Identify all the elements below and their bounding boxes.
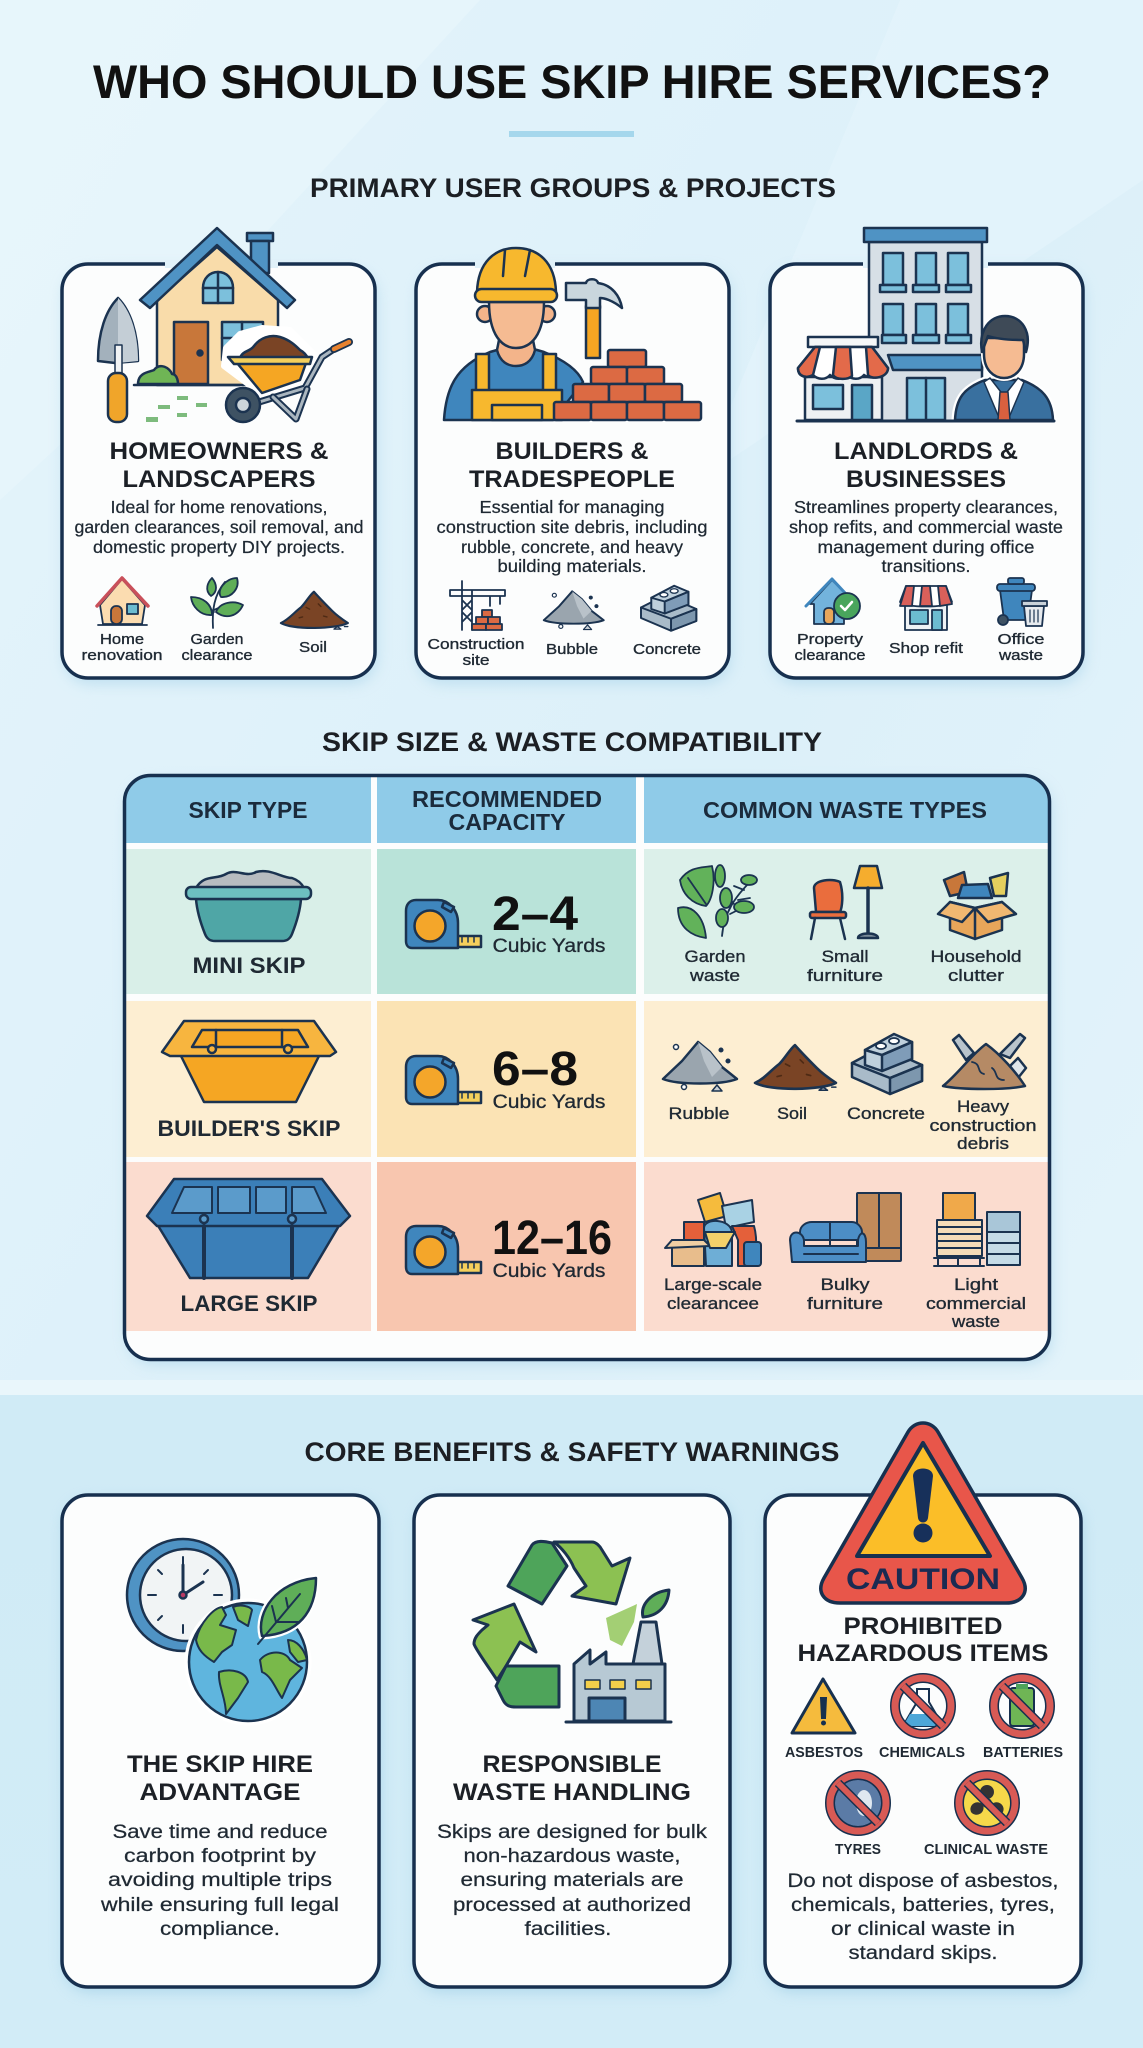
card description xyxy=(100,1821,339,1940)
small labels: Office xyxy=(998,631,1044,648)
small labels xyxy=(82,631,327,664)
small labels: Soil xyxy=(299,639,327,656)
card heading: ADVANTAGE xyxy=(140,1779,300,1806)
heading: primary user groups: PRIMARY USER GROUPS & PROJECTS xyxy=(310,173,836,203)
card description xyxy=(74,497,364,557)
waste labels row two: debris xyxy=(957,1134,1009,1153)
waste labels row two: construction xyxy=(930,1116,1036,1135)
icon: household clutter xyxy=(938,872,1016,939)
card description: Ideal for home renovations, xyxy=(110,497,328,517)
small labels: Garden xyxy=(190,631,244,648)
card heading: WASTE HANDLING xyxy=(453,1779,691,1806)
icon: heavy debris xyxy=(943,1034,1026,1089)
icon: office building, shop and businessman xyxy=(797,228,1054,421)
icon: large skip xyxy=(147,1179,350,1278)
icon: garden clearance xyxy=(191,578,243,628)
card description: non-hazardous waste, xyxy=(464,1845,680,1867)
waste labels row one: Garden xyxy=(684,947,746,966)
waste labels row three: commercial xyxy=(926,1294,1026,1313)
card description: Do not dispose of asbestos, xyxy=(788,1870,1058,1892)
card heading: TRADESPEOPLE xyxy=(469,466,675,493)
icon: shop refit xyxy=(900,586,952,630)
small labels: clearance xyxy=(794,647,866,664)
card description: domestic property DIY projects. xyxy=(93,537,345,557)
capacity: 6-8: 6–8 xyxy=(492,1043,578,1096)
card description: Streamlines property clearances, xyxy=(794,497,1058,517)
card description xyxy=(788,1870,1058,1964)
waste labels row one: Household xyxy=(930,947,1022,966)
card heading: HOMEOWNERS & xyxy=(110,438,328,465)
card heading xyxy=(834,438,1018,493)
icon: no tyres xyxy=(830,1775,886,1831)
title: WHO SHOULD USE SKIP HIRE SERVICES? xyxy=(93,55,1051,108)
table headers: COMMON WASTE TYPES xyxy=(703,797,987,823)
icon: sofa and wardrobe xyxy=(790,1193,901,1262)
card description: Skips are designed for bulk xyxy=(437,1821,707,1843)
card description: construction site debris, including xyxy=(436,517,708,537)
waste labels row three: furniture xyxy=(807,1294,883,1313)
icon: no chemicals xyxy=(895,1678,951,1734)
icon: caution sign xyxy=(821,1423,1025,1603)
small labels: Property xyxy=(797,631,864,648)
icon: garden waste xyxy=(678,865,757,938)
card heading: PROHIBITED xyxy=(844,1613,1002,1640)
waste labels row two: Concrete xyxy=(847,1104,925,1123)
table headers: CAPACITY xyxy=(448,809,566,835)
hazard labels: BATTERIES xyxy=(983,1744,1063,1761)
capacity: 12-16 xyxy=(406,1212,612,1282)
card heading xyxy=(453,1751,691,1806)
small labels: renovation xyxy=(82,647,162,664)
icon: concrete xyxy=(852,1034,922,1094)
icon: recycling arrows and factory xyxy=(473,1541,671,1722)
hazard labels: TYRES xyxy=(835,1841,881,1858)
card description: transitions. xyxy=(882,556,970,576)
small labels: Home xyxy=(100,631,144,648)
card description xyxy=(437,1821,707,1940)
icon: house, trowel and wheelbarrow xyxy=(98,228,349,422)
card description: management during office xyxy=(818,537,1034,557)
icon: clock and globe with leaf xyxy=(127,1539,316,1722)
card description: chemicals, batteries, tyres, xyxy=(791,1894,1055,1916)
waste labels row three: clearancee xyxy=(667,1294,759,1313)
waste labels row three: waste xyxy=(951,1312,1000,1331)
icon: rubble xyxy=(544,591,604,630)
waste labels row one: waste xyxy=(689,966,740,985)
small labels: Bubble xyxy=(546,641,598,658)
panel: builders and tradespeople xyxy=(416,248,731,684)
card heading xyxy=(127,1751,313,1806)
card heading xyxy=(798,1613,1048,1667)
icon: mini skip xyxy=(186,871,311,941)
icon: property clearance xyxy=(806,579,860,624)
icon: lawn dashes xyxy=(146,396,207,422)
card heading: RESPONSIBLE xyxy=(482,1751,662,1778)
small labels: clearance xyxy=(182,647,252,664)
capacity: 12-16: 12–16 xyxy=(492,1212,612,1265)
capacity: 6-8: Cubic Yards xyxy=(492,1092,606,1113)
heading: skip size: SKIP SIZE & WASTE COMPATIBILITY xyxy=(322,727,822,757)
card description: Save time and reduce xyxy=(112,1821,328,1843)
icon: large-scale clearance xyxy=(665,1193,761,1266)
waste labels row three xyxy=(664,1275,1026,1331)
title underline xyxy=(509,131,634,137)
small labels: site xyxy=(462,652,490,669)
label: LARGE SKIP xyxy=(180,1291,318,1316)
capacity: 2-4: Cubic Yards xyxy=(492,936,606,957)
icon: caution sign: CAUTION xyxy=(846,1563,1000,1596)
card description: Essential for managing xyxy=(480,497,664,517)
panel: the skip hire advantage xyxy=(62,1495,381,1992)
waste labels row two: Soil xyxy=(777,1104,807,1123)
card description: while ensuring full legal xyxy=(100,1894,339,1916)
icon: builder's skip xyxy=(162,1021,336,1102)
hazard labels xyxy=(785,1744,1063,1761)
waste labels row two: Rubble xyxy=(668,1104,730,1123)
waste labels row one xyxy=(684,947,1022,985)
label: BUILDER'S SKIP xyxy=(158,1116,340,1141)
panel: homeowners and landscapers xyxy=(62,228,377,684)
card description: standard skips. xyxy=(848,1942,998,1964)
card heading: BUSINESSES xyxy=(846,466,1006,493)
card description: shop refits, and commercial waste xyxy=(789,517,1063,537)
hazard labels: CLINICAL WASTE xyxy=(924,1841,1048,1858)
small labels: waste xyxy=(998,647,1043,664)
table headers: SKIP TYPE xyxy=(188,797,308,823)
waste labels row three: Light xyxy=(954,1275,998,1294)
capacity: 2-4: 2–4 xyxy=(492,888,578,941)
card description: building materials. xyxy=(498,556,646,576)
waste labels row two xyxy=(668,1097,1036,1153)
waste labels row one: furniture xyxy=(807,966,883,985)
icon: rubble xyxy=(663,1042,737,1091)
panel: landlords and businesses xyxy=(770,228,1085,684)
heading: core benefits: CORE BENEFITS & SAFETY WARNINGS xyxy=(304,1437,840,1467)
icon: soil xyxy=(755,1045,836,1090)
hazard labels: ASBESTOS xyxy=(785,1744,863,1761)
card description: ensuring materials are xyxy=(460,1869,684,1891)
waste labels row three: Bulky xyxy=(820,1275,870,1294)
card description: rubble, concrete, and heavy xyxy=(461,537,683,557)
small labels: Construction xyxy=(428,636,524,653)
icon: home renovation xyxy=(97,578,148,625)
card description: compliance. xyxy=(160,1918,280,1940)
card description: processed at authorized xyxy=(453,1894,691,1916)
capacity: 12-16: Cubic Yards xyxy=(492,1261,606,1282)
hazard labels xyxy=(835,1841,1048,1858)
waste labels row one: clutter xyxy=(948,966,1004,985)
panel: skip compatibility table xyxy=(124,775,1052,1364)
card heading: LANDSCAPERS xyxy=(122,466,316,493)
icon: concrete xyxy=(641,586,696,631)
card heading xyxy=(110,438,328,493)
hazard labels: CHEMICALS xyxy=(879,1744,965,1761)
small labels xyxy=(428,636,701,669)
icon: no clinical waste xyxy=(959,1775,1015,1831)
icon: small furniture xyxy=(810,866,882,939)
card heading: BUILDERS & xyxy=(496,438,648,465)
capacity: 2-4 xyxy=(406,888,606,957)
panel: responsible waste handling xyxy=(414,1495,732,1992)
card heading: THE SKIP HIRE xyxy=(127,1751,313,1778)
card description: or clinical waste in xyxy=(831,1918,1015,1940)
icon: asbestos warning xyxy=(792,1679,855,1733)
waste labels row two: Heavy xyxy=(957,1097,1010,1116)
card description xyxy=(436,497,708,576)
card description: avoiding multiple trips xyxy=(108,1869,332,1891)
card heading: HAZARDOUS ITEMS xyxy=(798,1640,1048,1667)
small labels: Shop refit xyxy=(889,640,964,657)
card heading xyxy=(469,438,675,493)
table cells xyxy=(126,777,1048,1331)
card description: garden clearances, soil removal, and xyxy=(74,517,364,537)
icon: office waste bins xyxy=(997,578,1047,626)
icon: construction site xyxy=(450,581,505,630)
icon: builder with hammer and bricks xyxy=(444,248,701,420)
table headers xyxy=(188,786,987,835)
panel: prohibited hazardous items xyxy=(765,1423,1083,1992)
card description: facilities. xyxy=(524,1918,612,1940)
small labels xyxy=(794,631,1044,664)
icon: no batteries xyxy=(994,1678,1050,1734)
small labels: Concrete xyxy=(633,641,701,658)
waste labels row one: Small xyxy=(822,947,868,966)
icon: soil xyxy=(281,592,348,629)
card description: carbon footprint by xyxy=(124,1845,316,1867)
capacity: 6-8 xyxy=(406,1043,606,1113)
icon: commercial waste xyxy=(934,1193,1020,1266)
card description xyxy=(789,497,1063,576)
waste labels row three: Large-scale xyxy=(664,1275,762,1294)
label: MINI SKIP xyxy=(192,953,306,978)
table headers: RECOMMENDED xyxy=(412,786,602,812)
card heading: LANDLORDS & xyxy=(834,438,1018,465)
